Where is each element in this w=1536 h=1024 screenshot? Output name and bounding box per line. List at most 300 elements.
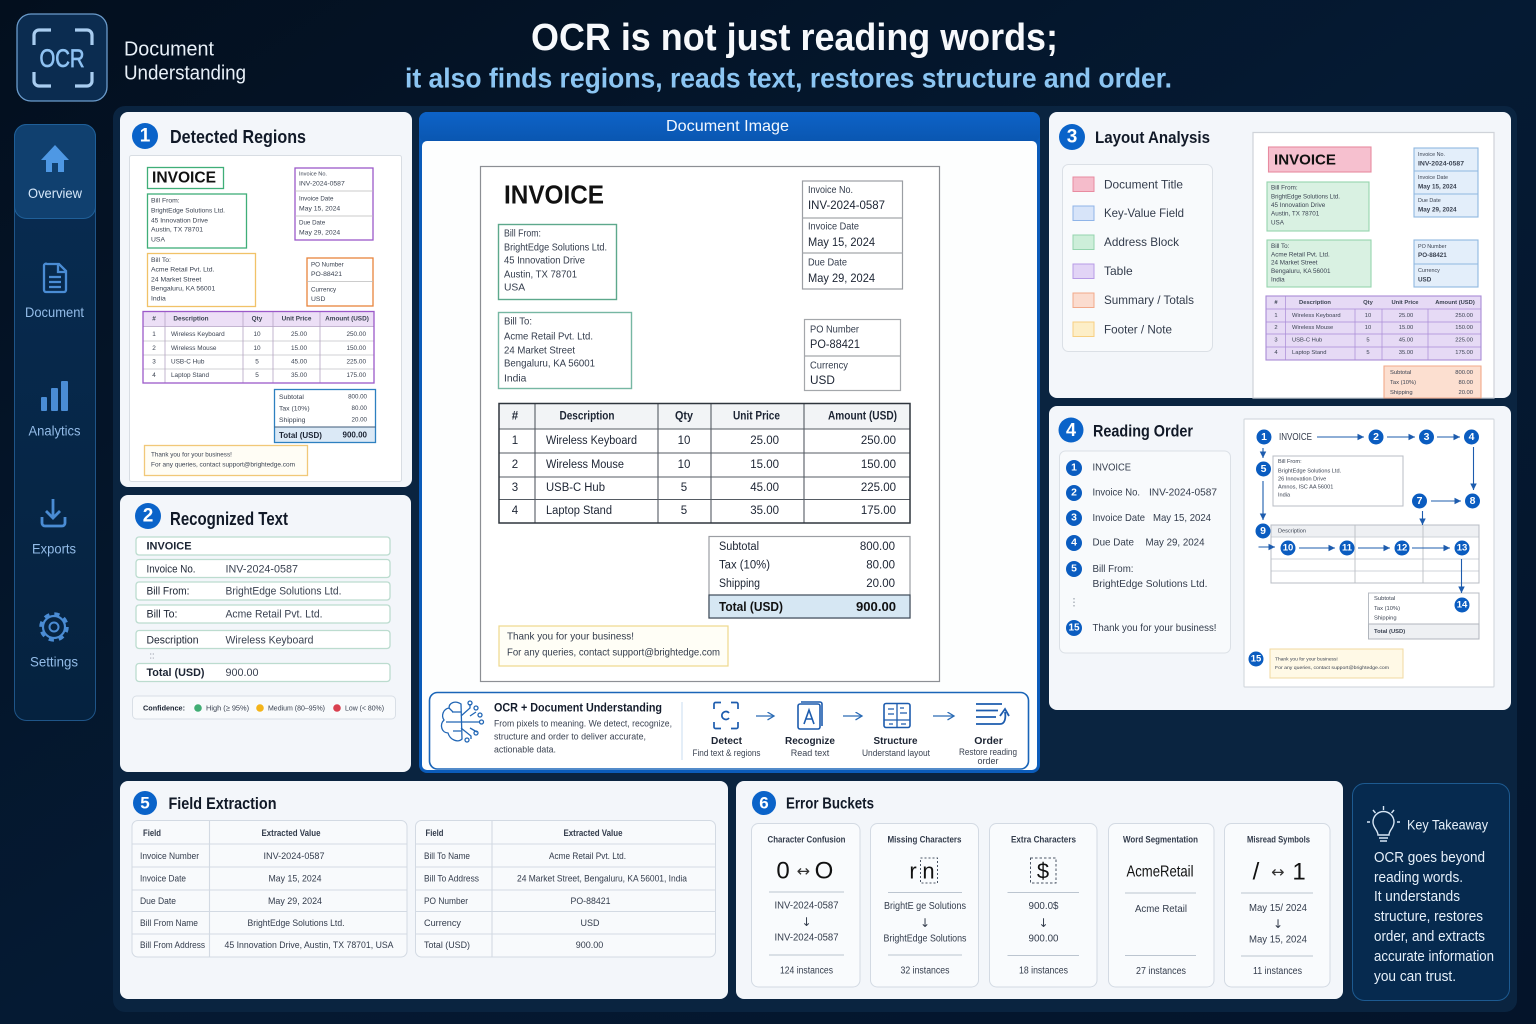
takeaway text — [1374, 850, 1494, 985]
step label: detect — [692, 735, 761, 758]
bill from block — [1273, 456, 1403, 506]
reading order list: INV-2024-0587 — [1149, 488, 1217, 498]
heading: Field Extraction — [168, 795, 276, 813]
region: bill from: Bill From: — [151, 198, 180, 204]
region: invoice meta: Due Date — [299, 220, 326, 226]
panel 6: error buckets — [736, 781, 1343, 999]
line-item table: 45.00 — [750, 482, 779, 494]
badge 6: 6 — [759, 794, 769, 812]
region: table: 45.00 — [291, 358, 307, 366]
card: character confusion: Character Confusion — [768, 834, 846, 846]
region: invoice meta: May 29, 2024 — [299, 230, 340, 236]
table: right fields: PO-88421 — [570, 896, 610, 906]
table: right fields — [416, 820, 716, 957]
region: invoice meta: Invoice Date — [299, 196, 334, 202]
region: table: # — [152, 316, 156, 322]
totals box — [709, 536, 910, 618]
table: right fields: Field — [426, 828, 444, 838]
takeaway text: order, and extracts — [1374, 929, 1485, 945]
region: bill from: USA — [151, 236, 165, 244]
header label: Document Image — [666, 118, 789, 135]
block: meta: May 29, 2024 — [1418, 206, 1457, 214]
bill to box: Bill To: — [504, 316, 532, 328]
logo: OCR badge — [17, 14, 107, 101]
step label: order — [959, 735, 1017, 766]
region: totals: 800.00 — [348, 394, 368, 400]
totals box: Tax (10%) — [719, 560, 770, 572]
footer block: Thank you for your business! — [1275, 656, 1338, 662]
takeaway text: reading words. — [1374, 870, 1463, 886]
invoice page — [480, 166, 940, 682]
block: totals: 20.00 — [1458, 390, 1473, 396]
takeaway text: accurate information — [1374, 949, 1494, 965]
step label: recognize: Read text — [791, 748, 830, 758]
card: misread symbols — [1224, 824, 1330, 987]
block: meta: INV-2024-0587 — [1418, 160, 1465, 168]
banner description: From pixels to meaning. We detect, recognize, — [494, 718, 672, 730]
reading flow badges: 3 — [1424, 431, 1430, 443]
block: table: Description — [1299, 300, 1331, 306]
recognized rows — [136, 537, 390, 682]
line-item table: Unit Price — [733, 410, 780, 422]
icon: brain — [441, 701, 484, 742]
card: missing characters: BrightE ge Solutions — [884, 901, 966, 912]
line-item table: # — [512, 410, 519, 422]
region: invoice meta: Invoice No. — [299, 172, 327, 178]
badge 3: 3 — [1067, 126, 1077, 148]
totals box: Subtotal — [719, 541, 759, 553]
banner description: structure and order to deliver accurate, — [494, 732, 646, 742]
card: character confusion: ↔ — [797, 862, 810, 880]
block: table — [1266, 296, 1481, 360]
block: bill to: Bengaluru, KA 56001 — [1271, 268, 1331, 275]
reading flow badges: 14 — [1457, 600, 1468, 610]
heading: Layout Analysis — [1095, 128, 1210, 147]
card: character confusion: 124 instances — [780, 966, 833, 976]
region: table: 1 — [152, 331, 156, 338]
banner: OCR + Document Understanding — [430, 692, 1028, 769]
region: table: 10 — [253, 331, 261, 338]
reading order list: 1 — [1071, 462, 1077, 474]
block: bill to: Bill To: — [1271, 243, 1290, 250]
region: totals: Total (USD) — [279, 431, 322, 440]
table: right fields: Extracted Value — [564, 828, 622, 838]
block: table: 4 — [1274, 350, 1278, 356]
card: word segmentation: Acme Retail — [1135, 904, 1187, 915]
card: word segmentation — [1108, 824, 1214, 987]
table: left fields: Field — [143, 828, 161, 838]
region: table: 175.00 — [346, 372, 366, 379]
table: right fields: 24 Market Street, Bengaluru, KA 56001, India — [517, 874, 687, 884]
region: bill from — [148, 194, 246, 248]
recognized rows: Invoice No. — [146, 564, 196, 576]
meta box: May 15, 2024 — [808, 235, 875, 249]
PO box — [804, 320, 900, 390]
bill from box: BrightEdge Solutions Ltd. — [504, 242, 607, 254]
card: extra characters: 900.0$ — [1029, 901, 1059, 912]
region: bill to: Bengaluru, KA 56001 — [151, 286, 215, 292]
badge 2: 2 — [143, 506, 153, 526]
region: totals: 80.00 — [352, 405, 368, 412]
region: totals: Tax (10%) — [279, 406, 310, 412]
recognized rows: Description — [146, 634, 198, 646]
block: totals — [1384, 366, 1481, 398]
table: right fields: Bill To Name — [424, 851, 470, 861]
region: bill from: Austin, TX 78701 — [151, 226, 203, 234]
region: table: 225.00 — [346, 358, 366, 366]
reading order list: 15 — [1068, 622, 1080, 634]
region: PO: Currency — [311, 286, 337, 294]
heading: Detected Regions — [170, 127, 306, 147]
brand name: Document — [124, 38, 214, 60]
table: left fields: 45 Innovation Drive, Austin, TX 78701, USA — [224, 940, 394, 950]
block: totals: 800.00 — [1455, 370, 1473, 376]
meta box: INV-2024-0587 — [808, 198, 885, 212]
invoice heading: INVOICE — [504, 180, 604, 210]
card: missing characters: ↓ — [920, 916, 930, 930]
recognized rows: 900.00 — [226, 667, 259, 679]
reading order list: 5 — [1071, 564, 1077, 574]
nav item: exports: Exports — [32, 540, 76, 556]
line-item table: USB-C Hub — [546, 482, 605, 494]
panel: document image — [419, 112, 1040, 773]
region: table: 250.00 — [346, 331, 366, 338]
reading order list: Invoice No. — [1092, 488, 1140, 498]
arrow — [933, 715, 954, 717]
table: right fields: 900.00 — [576, 940, 603, 950]
region: bill to: Acme Retail Pvt. Ltd. — [151, 266, 215, 274]
step label: order: Restore reading — [959, 747, 1017, 757]
table block — [1271, 525, 1479, 583]
region: table — [143, 312, 374, 383]
line-item table: Amount (USD) — [828, 410, 897, 422]
block: table: Wireless Mouse — [1292, 325, 1333, 331]
confidence legend: Medium (80–95%) — [268, 704, 325, 712]
block: table: 10 — [1365, 313, 1371, 319]
block: table: 175.00 — [1455, 350, 1473, 356]
reading flow badges: 15 — [1251, 654, 1262, 664]
totals box: Shipping — [719, 578, 760, 590]
region: table: Qty — [252, 316, 263, 322]
region: bill to: Bill To: — [151, 257, 171, 264]
nav item: document — [25, 264, 84, 320]
region: footer: Thank you for your business! — [151, 452, 232, 458]
bill from block: 26 Innovation Drive — [1278, 476, 1326, 482]
block: table: USB-C Hub — [1292, 338, 1322, 344]
line-item table: Wireless Mouse — [546, 459, 624, 471]
reading order list: INVOICE — [1092, 462, 1131, 474]
bill to box — [498, 312, 632, 388]
region: bill to: 24 Market Street — [151, 276, 201, 284]
table: right fields: Acme Retail Pvt. Ltd. — [549, 851, 626, 861]
card: missing characters: 32 instances — [900, 966, 950, 976]
reading flow badges: 5 — [1261, 463, 1267, 475]
panel 1: detected regions — [120, 112, 412, 487]
block: meta: Invoice Date — [1418, 175, 1448, 181]
PO box: PO-88421 — [810, 337, 860, 351]
recognized rows: Bill From: — [146, 586, 190, 598]
recognized rows: Bill To: — [146, 608, 178, 620]
block: table: 150.00 — [1455, 325, 1473, 331]
block: table: 45.00 — [1399, 338, 1413, 344]
step label: structure: Understand layout — [862, 748, 930, 758]
block: table: 1 — [1274, 313, 1278, 319]
reading flow badges: 2 — [1373, 431, 1379, 443]
line-item table: Description — [560, 410, 614, 422]
line-item table: 5 — [681, 505, 687, 517]
meta box: Due Date — [808, 258, 847, 268]
confidence legend — [132, 696, 396, 719]
badge 4 — [1058, 418, 1084, 442]
region: table: 4 — [152, 372, 156, 379]
badge 3 — [1059, 124, 1085, 150]
layout-coloured invoice — [1253, 132, 1494, 398]
region: PO: PO-88421 — [311, 271, 342, 278]
block: bill from — [1267, 182, 1369, 231]
block: bill from: BrightEdge Solutions Ltd. — [1271, 194, 1340, 200]
region: footer: For any queries, contact support@brightedge.com — [151, 462, 295, 468]
nav item: document: Document — [25, 304, 84, 320]
region: table: 35.00 — [291, 372, 307, 379]
recognized rows: INVOICE — [146, 540, 192, 552]
card: extra characters: 900.00 — [1029, 934, 1059, 944]
block: PO: PO Number — [1418, 244, 1447, 250]
card: character confusion: 0 — [776, 858, 790, 884]
table: left fields: May 15, 2024 — [268, 874, 322, 884]
badge 2 — [135, 503, 161, 529]
card: character confusion: ↓ — [801, 915, 812, 929]
table: left fields: INV-2024-0587 — [264, 851, 324, 861]
sidebar navigation — [14, 124, 96, 720]
card: extra characters: 18 instances — [1019, 966, 1068, 976]
table: left fields: Extracted Value — [262, 828, 320, 838]
title — [405, 17, 1172, 94]
nav item: analytics — [28, 381, 80, 438]
table: right fields: Currency — [424, 918, 462, 928]
table: left fields — [132, 820, 407, 957]
block: table: 5 — [1366, 338, 1370, 344]
table: left fields: Bill From Name — [140, 918, 198, 928]
step: structure — [884, 704, 910, 728]
block: table: Amount (USD) — [1435, 300, 1475, 306]
block: bill to: India — [1271, 276, 1285, 284]
region: invoice meta: May 15, 2024 — [299, 206, 340, 212]
card: misread symbols: Misread Symbols — [1247, 834, 1310, 846]
block: PO: USD — [1418, 276, 1432, 284]
reading order list: BrightEdge Solutions Ltd. — [1092, 579, 1208, 590]
line-item table: 250.00 — [861, 435, 896, 447]
totals box: 80.00 — [866, 560, 895, 572]
layout legend — [1062, 164, 1212, 352]
region: table: Description — [173, 316, 209, 322]
step label: order: Order — [974, 735, 1003, 747]
step: detect — [714, 702, 738, 728]
panel: key takeaway — [1352, 784, 1510, 1000]
block: meta: Invoice No. — [1418, 152, 1445, 158]
reading flow badges: 8 — [1470, 495, 1476, 507]
block: table: 25.00 — [1399, 313, 1413, 319]
reading order list: May 15, 2024 — [1153, 513, 1211, 524]
layout legend: Footer / Note — [1104, 322, 1172, 336]
block: bill to: Acme Retail Pvt. Ltd. — [1271, 252, 1330, 258]
step label: detect: Find text & regions — [692, 748, 761, 758]
region: table: 5 — [255, 372, 259, 379]
line-item table — [499, 404, 910, 523]
region: totals: 900.00 — [343, 430, 368, 440]
totals box: 20.00 — [866, 578, 895, 590]
totals block: Subtotal — [1374, 596, 1395, 602]
region: table: 2 — [152, 345, 156, 352]
annotated invoice — [130, 156, 402, 482]
reading flow badges — [1248, 430, 1480, 666]
block: table: 250.00 — [1455, 313, 1473, 319]
region: bill from: 45 Innovation Drive — [151, 218, 208, 224]
badge 1 — [132, 123, 158, 149]
reading flow badges: 13 — [1457, 542, 1467, 554]
block: bill to — [1267, 240, 1371, 287]
title: OCR is not just reading words; — [531, 17, 1058, 59]
card: word segmentation: AcmeRetail — [1126, 864, 1194, 880]
bill from box: Bill From: — [504, 228, 541, 240]
line-item table: Wireless Keyboard — [546, 435, 637, 447]
block: totals: Subtotal — [1390, 370, 1411, 376]
recognized rows: INV-2024-0587 — [226, 564, 298, 576]
card: missing characters: r — [909, 858, 917, 884]
bill from block: India — [1278, 492, 1291, 498]
line-item table: 10 — [678, 459, 690, 471]
reading flow badges: 11 — [1342, 542, 1353, 554]
meta box: Invoice Date — [808, 222, 859, 232]
panel 5: field extraction — [120, 781, 728, 999]
banner heading: OCR + Document Understanding — [494, 700, 662, 714]
line-item table: 1 — [512, 435, 518, 447]
footer note: For any queries, contact support@brightedge.com — [507, 648, 720, 658]
takeaway text: structure, restores — [1374, 909, 1483, 925]
nav item: overview — [14, 124, 96, 218]
step label: structure: Structure — [874, 735, 918, 747]
reading order diagram: INVOICE — [1279, 431, 1312, 443]
region: PO — [307, 258, 373, 306]
table: right fields: Bill To Address — [424, 874, 479, 884]
nav item: overview: Overview — [28, 185, 83, 201]
logo: OCR badge: OCR — [40, 45, 84, 73]
footer note: Thank you for your business! — [507, 632, 634, 642]
line-item table: Qty — [675, 410, 694, 422]
block: PO — [1414, 240, 1478, 287]
region: table: Wireless Mouse — [171, 345, 217, 352]
block: table: Qty — [1363, 300, 1374, 306]
card: character confusion: INV-2024-0587 — [774, 932, 838, 944]
meta box: May 29, 2024 — [808, 271, 875, 285]
card: character confusion: INV-2024-0587 — [774, 900, 838, 912]
reading order list: Due Date — [1092, 538, 1134, 548]
bill from box: 45 Innovation Drive — [504, 256, 585, 266]
block: table: 225.00 — [1455, 338, 1473, 344]
step label: order: order — [977, 756, 999, 766]
block: totals: Shipping — [1390, 390, 1413, 396]
bill from box: USA — [504, 282, 525, 294]
block: bill from: 45 Innovation Drive — [1271, 202, 1326, 209]
table block: Description — [1278, 528, 1306, 534]
card: misread symbols: 1 — [1292, 858, 1306, 886]
bill from block: Bill From: — [1278, 459, 1302, 465]
block: table: 5 — [1366, 350, 1370, 356]
layout legend: Table — [1104, 264, 1133, 278]
meta box — [802, 181, 902, 289]
block: meta: May 15, 2024 — [1418, 184, 1457, 190]
line-item table: 15.00 — [750, 459, 779, 471]
totals block: Shipping — [1374, 616, 1397, 622]
reading order list — [1060, 451, 1230, 653]
brand name — [124, 38, 246, 84]
region: table: 5 — [255, 358, 259, 366]
region: totals: Subtotal — [279, 394, 304, 401]
title: it also finds regions, reads text, restores structure and order. — [405, 62, 1172, 94]
region: table: USB-C Hub — [171, 358, 205, 366]
reading flow badges: 4 — [1469, 431, 1475, 443]
reading order list: 4 — [1071, 538, 1077, 548]
table: left fields: BrightEdge Solutions Ltd. — [248, 918, 344, 928]
heading: Reading Order — [1093, 422, 1193, 440]
block: table: 10 — [1365, 325, 1371, 331]
region: title: INVOICE — [152, 170, 216, 186]
totals block — [1368, 593, 1479, 639]
bill from block: BrightEdge Solutions Ltd. — [1278, 468, 1342, 474]
bill to box: 24 Market Street — [504, 346, 575, 356]
block: bill from: Bill From: — [1271, 184, 1298, 192]
region: table: Laptop Stand — [171, 372, 209, 379]
block: table: 15.00 — [1399, 325, 1413, 331]
totals block: Total (USD) — [1374, 629, 1405, 635]
banner description: actionable data. — [494, 744, 556, 756]
reading order list: Thank you for your business! — [1092, 623, 1216, 634]
region: totals: Shipping — [279, 417, 306, 424]
PO box: PO Number — [810, 324, 860, 336]
badge 4: 4 — [1066, 420, 1076, 440]
card: missing characters: n — [922, 858, 935, 884]
block: table: # — [1274, 300, 1278, 306]
step label: recognize: Recognize — [785, 735, 835, 747]
block: title — [1268, 147, 1371, 172]
region: bill to: India — [151, 296, 166, 302]
line-item table: 3 — [512, 482, 518, 494]
region: table: 150.00 — [346, 345, 366, 352]
block: table: 2 — [1274, 325, 1278, 331]
reading order list: Bill From: — [1092, 564, 1134, 575]
banner description — [494, 718, 672, 756]
card: missing characters: BrightEdge Solutions — [884, 934, 967, 944]
brand name: Understanding — [124, 62, 246, 84]
card: misread symbols: ↓ — [1273, 917, 1283, 931]
step label: structure — [862, 735, 930, 758]
block: table: Unit Price — [1391, 300, 1419, 306]
heading: Recognized Text — [170, 509, 288, 529]
bill to box: Acme Retail Pvt. Ltd. — [504, 332, 593, 342]
card: missing characters: Missing Characters — [888, 834, 962, 846]
bill to box: India — [504, 374, 527, 384]
block: meta — [1414, 148, 1478, 217]
line-item table: 5 — [681, 482, 687, 494]
bill from box: Austin, TX 78701 — [504, 270, 577, 280]
card: misread symbols: May 15, 2024 — [1249, 934, 1308, 946]
totals box: 800.00 — [860, 541, 895, 553]
reading order list: Invoice Date — [1092, 513, 1145, 524]
panel 4: reading order — [1049, 406, 1511, 710]
totals block: Tax (10%) — [1374, 606, 1400, 612]
table: left fields: Invoice Number — [140, 851, 199, 861]
panel 2: recognized text — [120, 495, 411, 772]
block: bill from: USA — [1271, 220, 1285, 226]
